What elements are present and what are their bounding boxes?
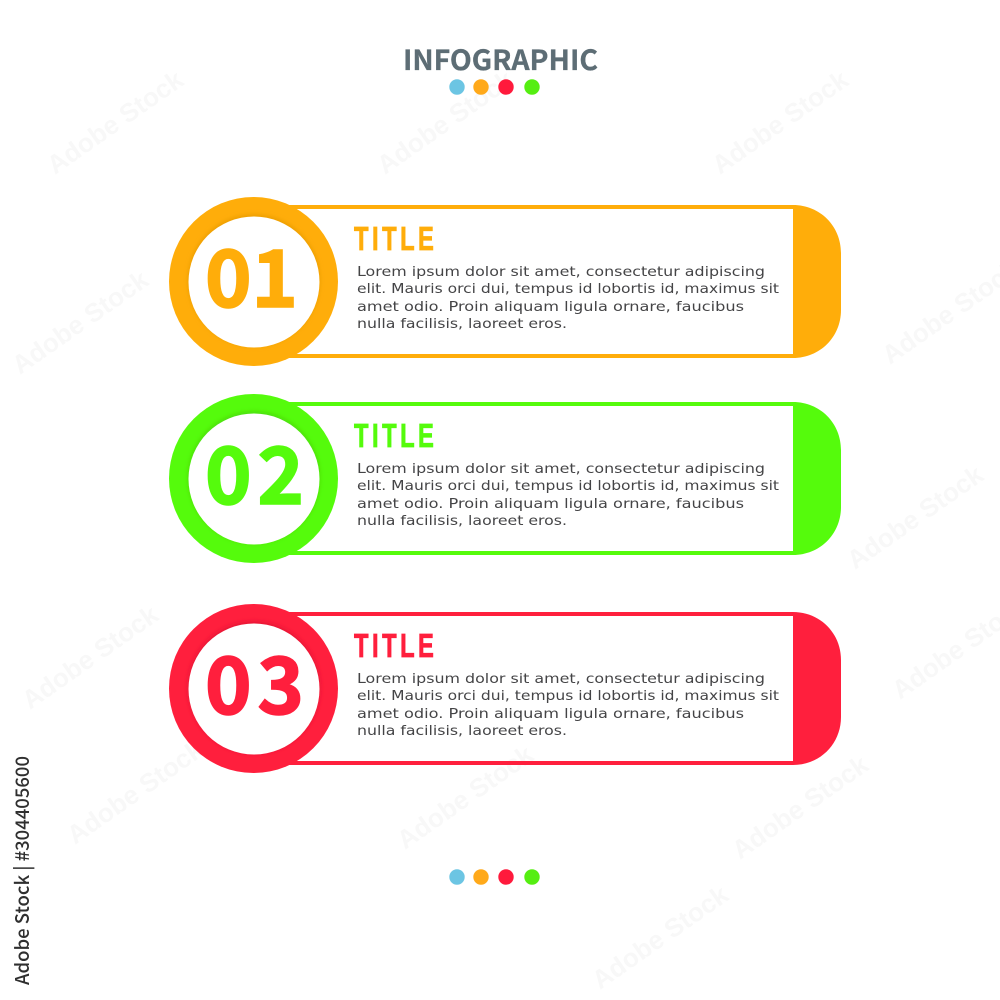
text: Adobe Stock bbox=[6, 264, 154, 380]
text: Adobe Stock bbox=[16, 599, 164, 715]
panel frame with right cap bbox=[250, 612, 841, 765]
item text: elit. Mauris orci dui, tempus id lobortis id, maximus sit bbox=[357, 478, 779, 494]
item text: amet odio. Proin aliquam ligula ornare, faucibus bbox=[357, 299, 744, 315]
item text: amet odio. Proin aliquam ligula ornare, faucibus bbox=[357, 496, 744, 512]
title: INFOGRAPHIC bbox=[403, 39, 598, 79]
item text: nulla facilisis, laoreet eros. bbox=[357, 723, 567, 739]
number badge: 03 bbox=[205, 622, 304, 737]
top colour dots bbox=[449, 79, 540, 95]
text: Adobe Stock bbox=[61, 734, 209, 850]
text: Adobe Stock bbox=[41, 64, 189, 180]
stock credit: Adobe Stock | #304405600 bbox=[8, 756, 35, 985]
number badge: 02 bbox=[205, 412, 304, 527]
panel: item 02 bbox=[169, 394, 841, 563]
text: Adobe Stock bbox=[841, 459, 989, 575]
text: Adobe Stock bbox=[391, 739, 539, 855]
number badge bbox=[169, 394, 338, 563]
item text: nulla facilisis, laoreet eros. bbox=[357, 513, 567, 529]
text: Adobe Stock bbox=[726, 749, 874, 865]
item text: amet odio. Proin aliquam ligula ornare, faucibus bbox=[357, 706, 744, 722]
item text: Lorem ipsum dolor sit amet, consectetur adipiscing bbox=[357, 671, 765, 687]
number badge: 01 bbox=[205, 215, 298, 330]
bottom colour dots bbox=[449, 869, 540, 885]
panel: item 01 bbox=[169, 197, 841, 366]
item text: elit. Mauris orci dui, tempus id lobortis id, maximus sit bbox=[357, 688, 779, 704]
panel: item 03 bbox=[169, 604, 841, 773]
item heading: TITLE bbox=[354, 221, 434, 258]
text: Adobe Stock bbox=[706, 64, 854, 180]
number badge bbox=[169, 197, 338, 366]
item text: Lorem ipsum dolor sit amet, consectetur adipiscing bbox=[357, 264, 765, 280]
item text bbox=[357, 671, 779, 739]
text: Adobe Stock bbox=[371, 64, 519, 180]
item heading: TITLE bbox=[354, 418, 434, 455]
text: Adobe Stock bbox=[586, 879, 734, 995]
item text: nulla facilisis, laoreet eros. bbox=[357, 316, 567, 332]
number badge bbox=[169, 604, 338, 773]
item text bbox=[357, 264, 779, 332]
item text: elit. Mauris orci dui, tempus id lobortis id, maximus sit bbox=[357, 281, 779, 297]
item text bbox=[357, 461, 779, 529]
panel frame with right cap bbox=[250, 402, 841, 555]
panel frame with right cap bbox=[250, 205, 841, 358]
item text: Lorem ipsum dolor sit amet, consectetur adipiscing bbox=[357, 461, 765, 477]
item heading: TITLE bbox=[354, 628, 434, 665]
